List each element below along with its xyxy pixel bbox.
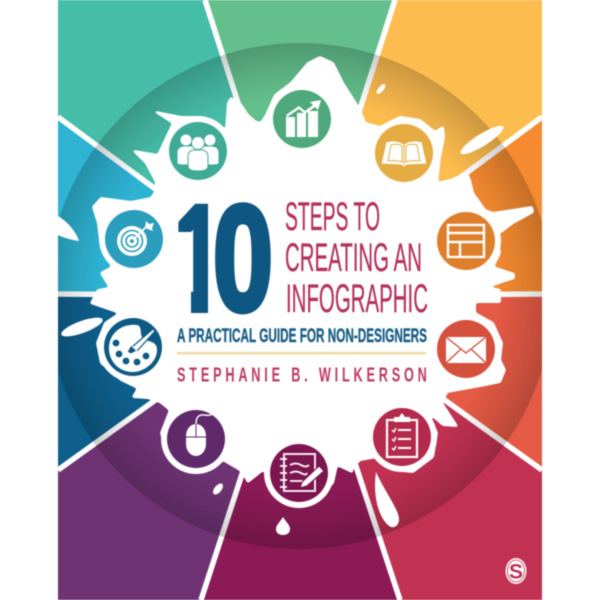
- icon: clipboard checklist: [367, 402, 437, 472]
- icon: envelope: [431, 314, 501, 384]
- white paint splash: [91, 57, 533, 503]
- icon: open book: [369, 118, 439, 188]
- icon: target with dart: [99, 204, 169, 274]
- icon: paint palette and brush: [98, 312, 168, 382]
- big numeral 10: 1: [174, 174, 224, 342]
- publisher logo: [506, 558, 526, 584]
- title: INFOGRAPHIC: [286, 277, 428, 321]
- author: STEPHANIE B. WILKERSON: [177, 363, 427, 386]
- paint drops: [58, 83, 506, 535]
- icon: notebook and pen: [264, 438, 334, 508]
- icon: bar chart with arrow: [267, 84, 337, 154]
- title: [285, 195, 428, 321]
- publisher logo: S: [509, 560, 523, 584]
- icon: people: [163, 116, 233, 186]
- big numeral 10: 0: [213, 174, 273, 342]
- icon: computer mouse: [161, 404, 231, 474]
- title: STEPS TO: [285, 195, 380, 239]
- divider rule: [177, 352, 426, 354]
- icon: page layout: [431, 206, 501, 276]
- title: CREATING AN: [285, 236, 422, 280]
- subtitle: A PRACTICAL GUIDE FOR NON-DESIGNERS: [177, 325, 427, 347]
- big numeral 10: [178, 201, 272, 316]
